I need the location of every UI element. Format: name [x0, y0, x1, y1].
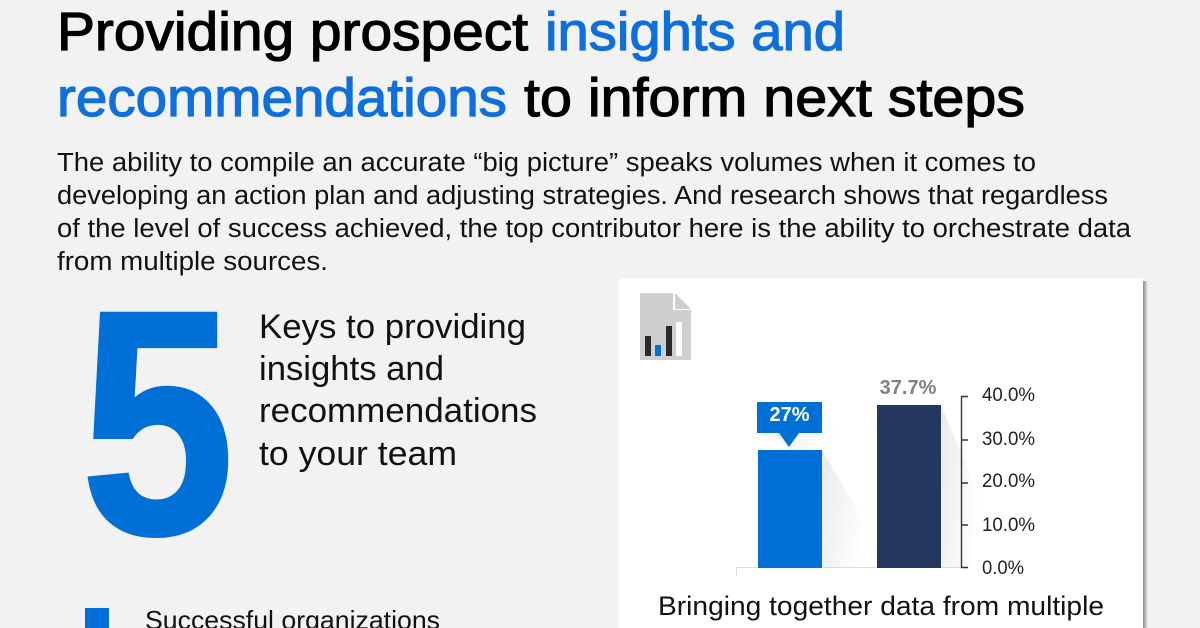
axis [962, 385, 1035, 579]
bar: 27% [758, 450, 822, 568]
value label: 37.7%: 37.7% [880, 377, 937, 399]
bullet marker [85, 608, 109, 628]
axis: 0.0% [982, 558, 1024, 579]
bar chart [736, 377, 1035, 579]
callout: 27%: 27% [769, 404, 810, 426]
card shadow [1143, 281, 1148, 628]
big number 5: 5 [81, 245, 234, 601]
card body [619, 278, 1143, 628]
keys heading: recommendations [259, 392, 537, 430]
axis: 10.0% [982, 515, 1035, 536]
chart caption: Bringing together data from multiple [658, 591, 1104, 621]
intro text block [57, 149, 1132, 276]
bullet item [85, 605, 440, 628]
callout: 27% [757, 402, 822, 447]
panel: chart card [619, 278, 1148, 628]
title [57, 2, 1025, 128]
intro text block: of the level of success achieved, the top contributor here is the ability to orchestrate data [57, 215, 1132, 243]
axis: 40.0% [982, 385, 1035, 406]
icon: document with bar chart [640, 293, 691, 360]
axis: 30.0% [982, 429, 1035, 450]
bar: 37.7% [877, 405, 941, 568]
keys heading: insights and [259, 350, 444, 388]
title: to inform next steps [524, 68, 1025, 128]
intro text block: from multiple sources. [57, 248, 328, 276]
axis: 20.0% [982, 471, 1035, 492]
intro text block: developing an action plan and adjusting strategies. And research shows that regardless [57, 182, 1108, 210]
intro text block: The ability to compile an accurate “big picture” speaks volumes when it comes to [57, 149, 1036, 177]
title: recommendations [57, 68, 507, 128]
title: Providing prospect [57, 2, 528, 62]
keys heading: Keys to providing [259, 308, 526, 346]
title: insights and [545, 2, 845, 62]
bar shadows [822, 450, 872, 568]
keys heading: to your team [259, 435, 457, 473]
baseline [736, 568, 961, 576]
keys heading [259, 308, 537, 473]
